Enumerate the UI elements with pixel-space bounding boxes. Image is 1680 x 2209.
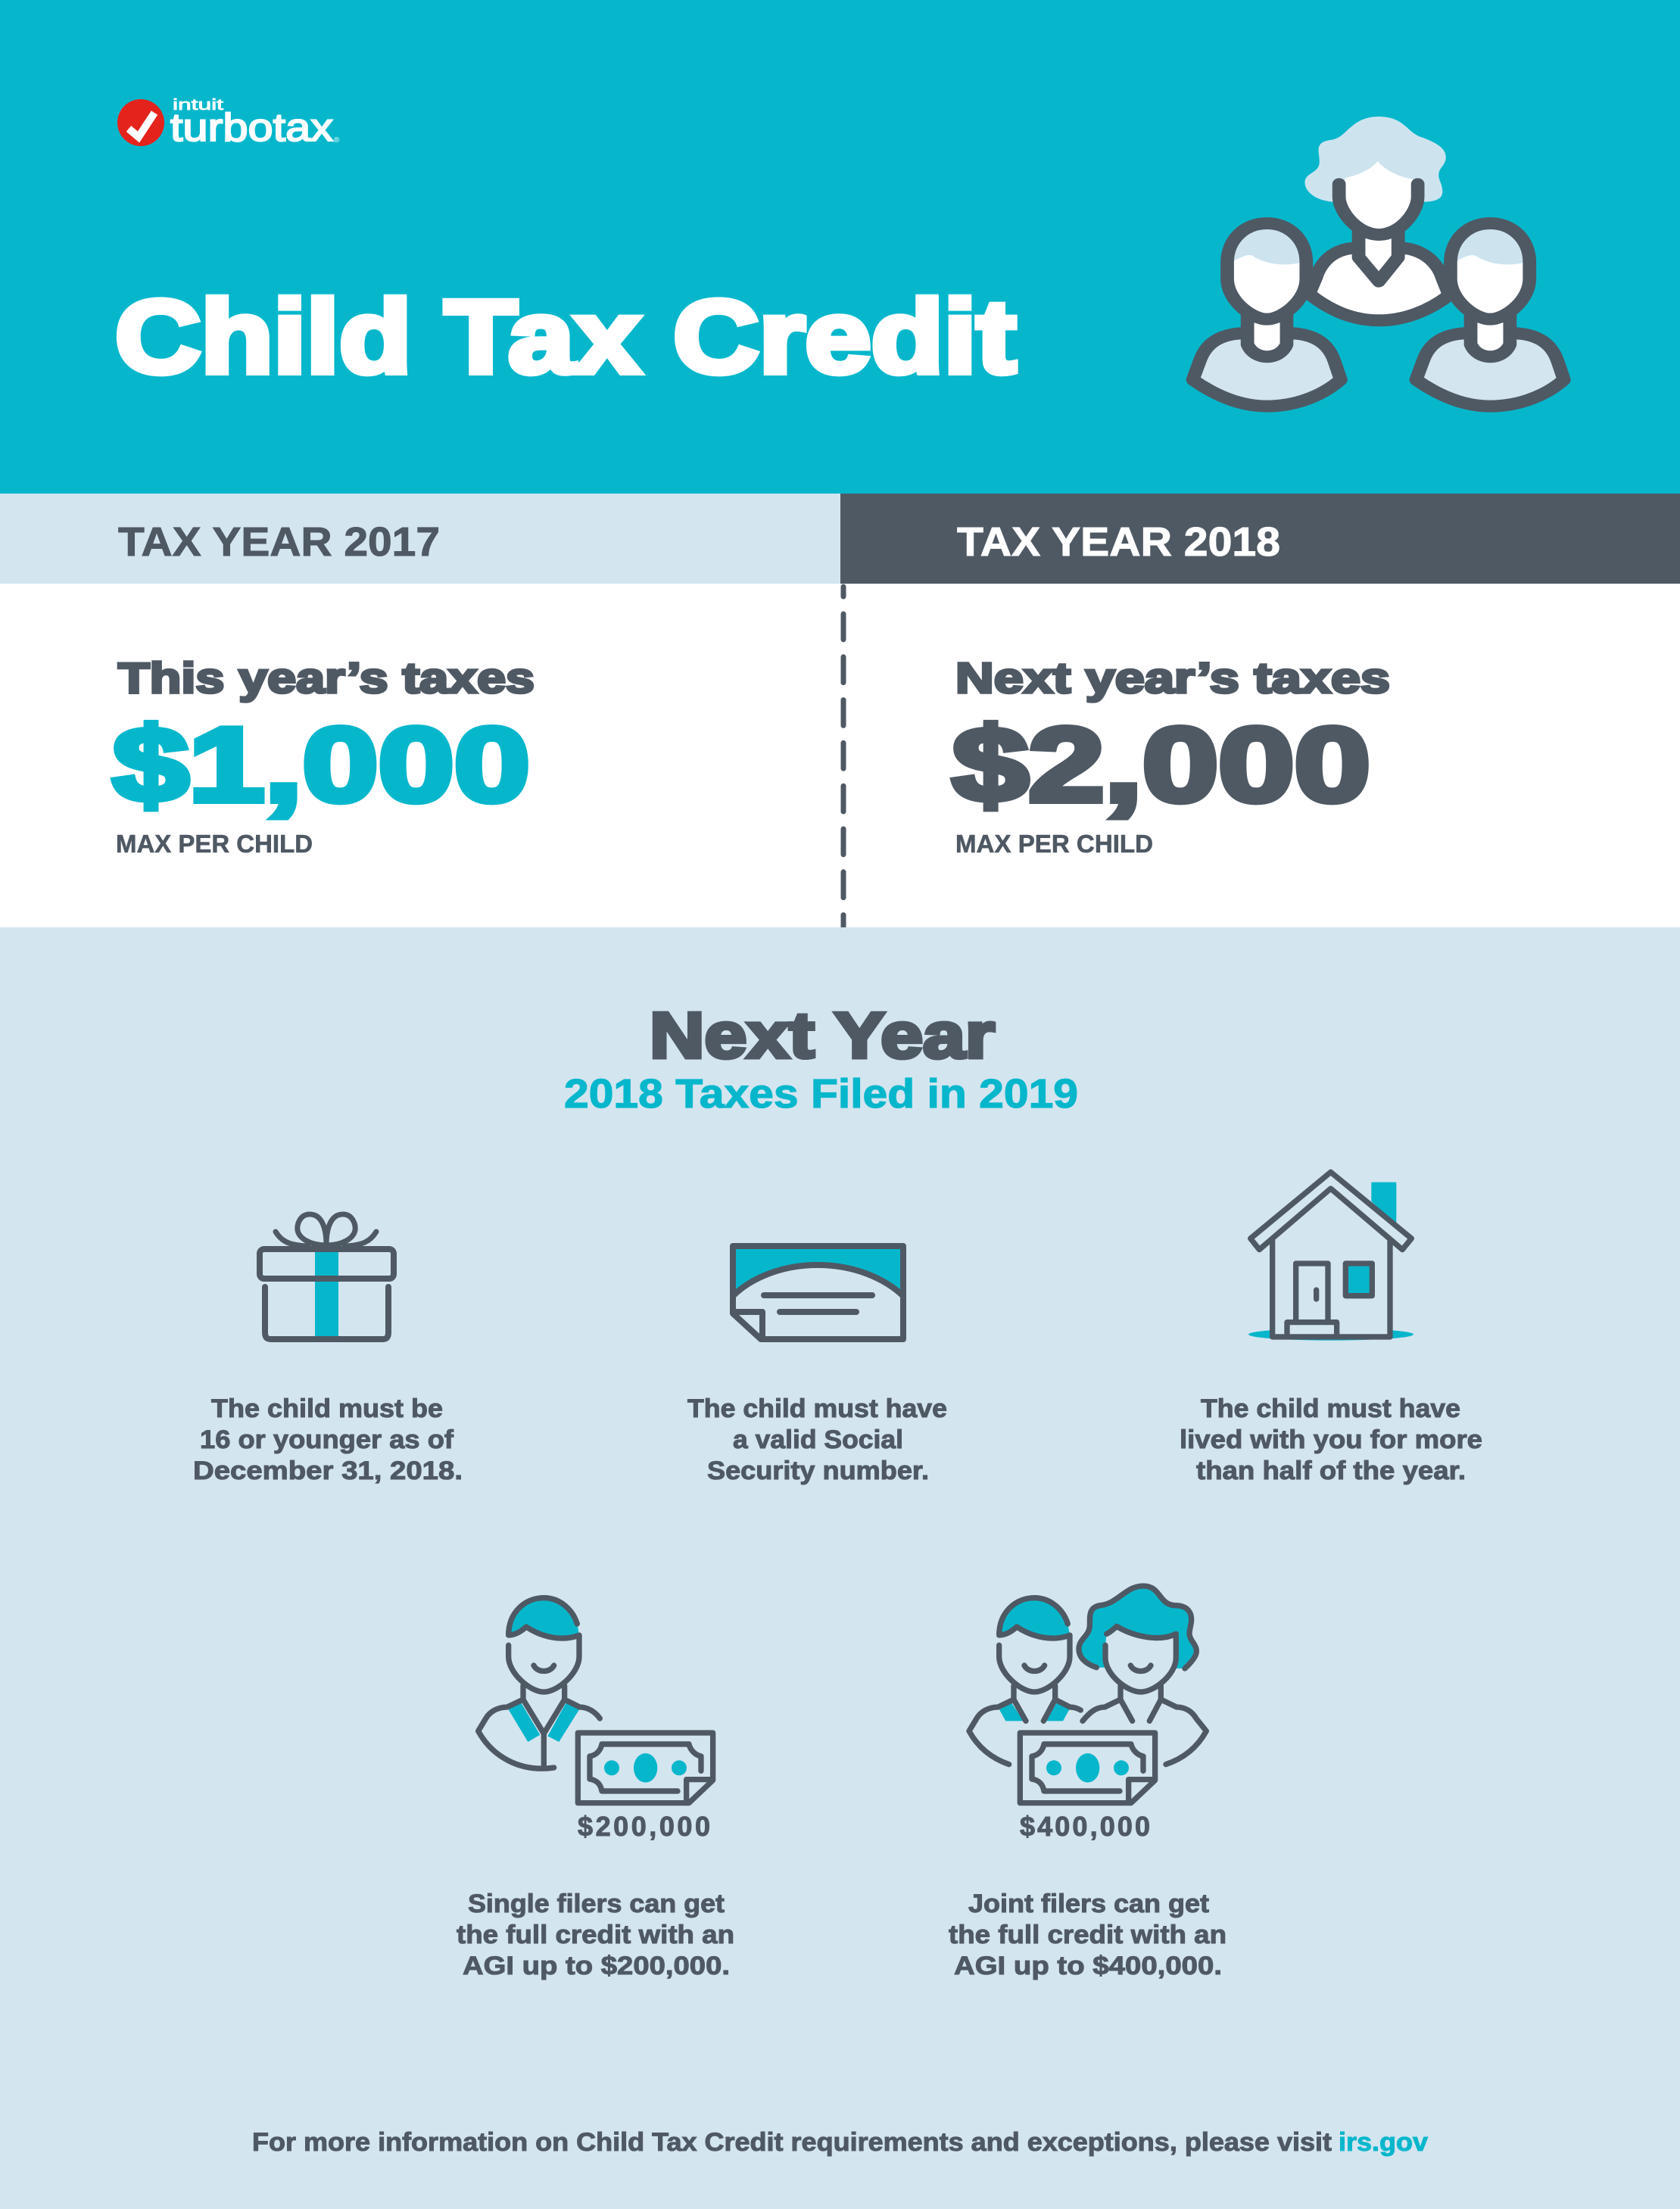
amount: this year xyxy=(113,654,535,858)
label: $400,000: $400,000 xyxy=(1020,1811,1150,1842)
text: social security requirement: The child must have xyxy=(687,1394,947,1423)
amount: next year: $2,000 xyxy=(952,706,1370,824)
text: single filers: Single filers can get xyxy=(468,1890,725,1918)
text: social security requirement xyxy=(687,1394,947,1485)
panel: tax year 2017 xyxy=(0,494,840,584)
label: $200,000: $200,000 xyxy=(578,1811,710,1842)
footer note: irs.gov xyxy=(1339,2128,1428,2157)
icon: family xyxy=(1193,117,1564,407)
panel: tax year 2018: TAX YEAR 2018 xyxy=(957,519,1280,565)
child left xyxy=(1193,223,1341,407)
child right xyxy=(1416,223,1564,407)
amount: this year: This year’s taxes xyxy=(118,654,535,703)
logo: TurboTax: ® xyxy=(334,136,340,145)
amount: next year xyxy=(952,654,1390,858)
text: single filers: the full credit with an xyxy=(457,1921,734,1949)
text: joint filers: the full credit with an xyxy=(949,1921,1226,1949)
text: residency requirement: than half of the year. xyxy=(1196,1457,1466,1485)
panel: amounts xyxy=(0,584,1680,927)
title: Child Tax Credit xyxy=(115,279,1016,395)
text: joint filers: Joint filers can get xyxy=(968,1890,1209,1918)
footer note: For more information on Child Tax Credit requirements and exceptions, please visit xyxy=(252,2128,1332,2157)
panel: next year requirements xyxy=(0,927,1680,2209)
text: single filers: AGI up to $200,000. xyxy=(463,1952,730,1980)
text: age requirement xyxy=(193,1394,463,1485)
text: single filers xyxy=(457,1890,734,1980)
icon: gift xyxy=(260,1214,394,1339)
text: residency requirement xyxy=(1180,1394,1482,1485)
text: social security requirement: Security number. xyxy=(707,1457,929,1485)
amount: this year: $1,000 xyxy=(113,706,530,824)
logo: TurboTax xyxy=(117,97,340,150)
panel: tax year 2018 xyxy=(840,494,1680,584)
panel: header xyxy=(0,0,1680,494)
text: age requirement: The child must be xyxy=(211,1394,443,1423)
panel: tax year 2017: TAX YEAR 2017 xyxy=(118,519,440,565)
text: age requirement: 16 or younger as of xyxy=(200,1425,454,1454)
amount: this year: MAX PER CHILD xyxy=(116,830,313,858)
icon: house xyxy=(1248,1172,1414,1341)
text: joint filers xyxy=(949,1890,1226,1980)
subheading: 2018 Taxes Filed in 2019 xyxy=(564,1071,1078,1117)
amount: next year: MAX PER CHILD xyxy=(955,830,1153,858)
logo: TurboTax: intuit xyxy=(173,97,224,114)
text: joint filers: AGI up to $400,000. xyxy=(954,1952,1222,1980)
text: age requirement: December 31, 2018. xyxy=(193,1457,463,1485)
icon: single filer with bill xyxy=(478,1598,713,1803)
bill xyxy=(578,1733,713,1803)
text: residency requirement: The child must have xyxy=(1201,1394,1460,1423)
amount: next year: Next year’s taxes xyxy=(955,654,1390,703)
heading: next year: Next Year xyxy=(650,1000,995,1072)
icon: social security card xyxy=(733,1246,903,1339)
logo: TurboTax: turbotax xyxy=(170,106,333,150)
bill xyxy=(1020,1733,1155,1803)
text: residency requirement: lived with you for more xyxy=(1180,1425,1482,1454)
woman xyxy=(1079,1586,1206,1765)
icon: joint filers with bill xyxy=(969,1586,1206,1803)
text: social security requirement: a valid Social xyxy=(733,1425,903,1454)
